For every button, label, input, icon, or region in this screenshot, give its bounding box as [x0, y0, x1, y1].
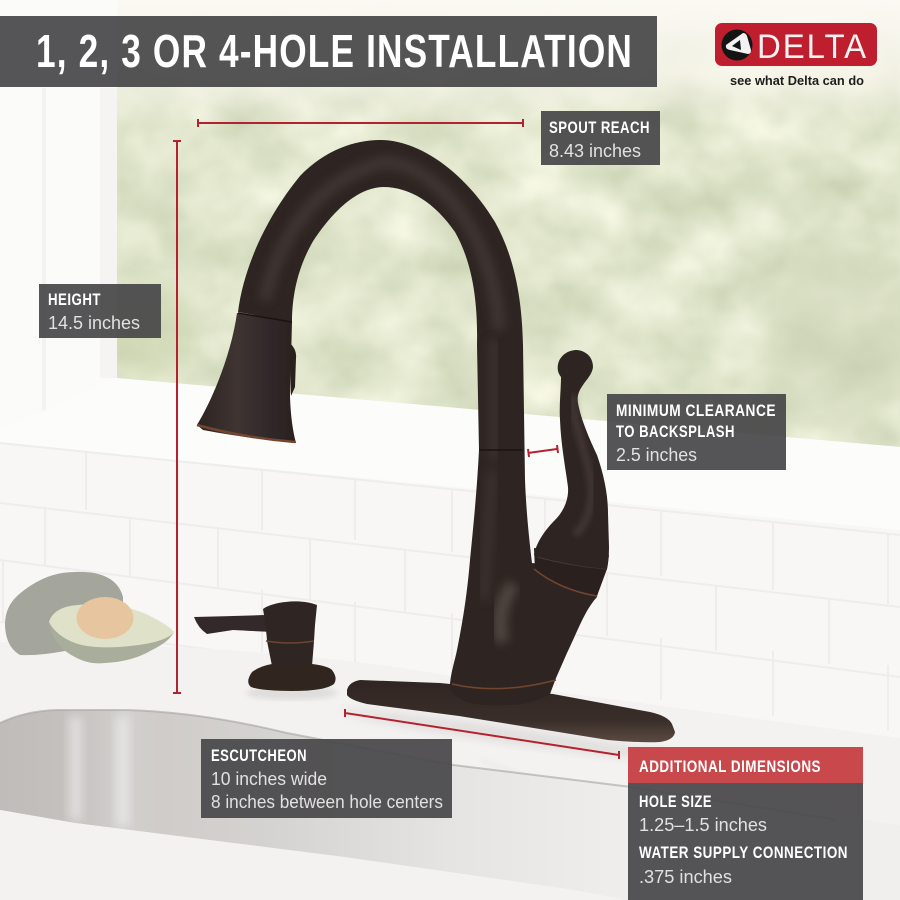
escutcheon shadow: [341, 703, 679, 767]
countertop: [0, 642, 900, 900]
Delta logo: DELTA: [757, 28, 868, 66]
callout: escutcheon: ESCUTCHEON: [211, 747, 307, 765]
stem highlight: [484, 340, 494, 600]
callout: spout reach: 8.43 inches: [549, 141, 641, 161]
panel header: [628, 747, 863, 783]
soap dispenser: [194, 601, 338, 700]
callout: escutcheon: [201, 739, 452, 818]
sprayer button: [290, 343, 296, 396]
lever handle: [534, 350, 609, 569]
sink basin: [0, 710, 900, 900]
panel body: WATER SUPPLY CONNECTION: [639, 844, 848, 862]
avocado pit: [76, 597, 134, 639]
whole avocado: [5, 572, 123, 655]
callout: minimum clearance: [607, 394, 786, 470]
callout: height: [39, 284, 161, 338]
measure: spout reach line: [198, 119, 523, 127]
Delta logo: see what Delta can do: [730, 73, 864, 88]
gooseneck spout and stem: [238, 140, 600, 705]
panel header: ADDITIONAL DIMENSIONS: [639, 758, 821, 776]
callout: minimum clearance: TO BACKSPLASH: [616, 423, 735, 441]
faucet: [197, 140, 679, 767]
window view of trees: [105, 0, 900, 450]
callout: spout reach: SPOUT REACH: [549, 119, 650, 137]
callout: minimum clearance: 2.5 inches: [616, 445, 697, 465]
dispenser spout: [194, 615, 277, 634]
callout: escutcheon: 8 inches between hole centers: [211, 792, 443, 812]
avocado half skin: [49, 610, 174, 663]
measure: clearance line: [528, 445, 558, 457]
title banner: 1, 2, 3 OR 4-HOLE INSTALLATION: [36, 25, 633, 77]
sprayer head: [197, 313, 296, 443]
Delta logo: [715, 23, 877, 88]
panel: additional dimensions: [628, 747, 863, 900]
callout: height: 14.5 inches: [48, 313, 140, 333]
callout: height: HEIGHT: [48, 291, 101, 309]
measure: height line: [173, 141, 181, 693]
panel body: .375 inches: [639, 867, 732, 887]
avocado: [5, 570, 174, 663]
panel body: [628, 783, 863, 900]
gooseneck highlight: [265, 162, 499, 330]
window frame: [0, 0, 900, 530]
callout: escutcheon: 10 inches wide: [211, 769, 327, 789]
measure: escutcheon line: [345, 709, 619, 759]
handle cartridge: [534, 548, 609, 596]
panel body: 1.25–1.5 inches: [639, 815, 767, 835]
callout: minimum clearance: MINIMUM CLEARANCE: [616, 402, 776, 420]
body highlight: [500, 585, 514, 642]
escutcheon plate: [347, 680, 675, 742]
dispenser head and neck: [263, 601, 317, 666]
subway tile grout: [0, 443, 900, 740]
title banner: [0, 16, 657, 87]
avocado flesh: [49, 604, 174, 647]
callout: spout reach: [541, 111, 660, 165]
panel body: HOLE SIZE: [639, 793, 712, 811]
dispenser base: [248, 664, 336, 691]
logo emblem: [722, 30, 752, 60]
